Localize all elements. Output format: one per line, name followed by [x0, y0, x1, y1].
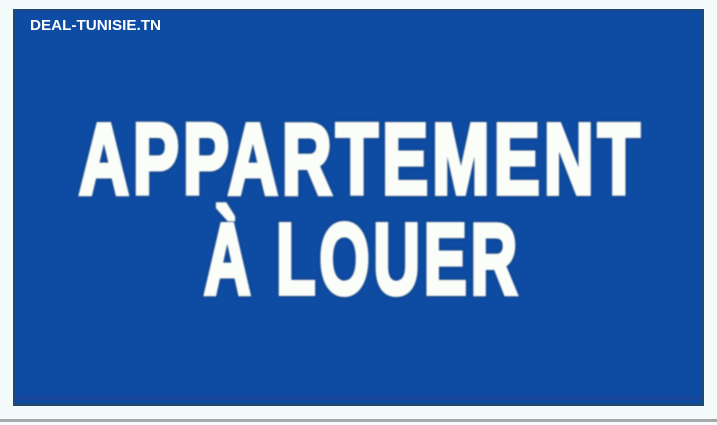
heading: main title [79, 104, 644, 316]
watermark: site name: DEAL-TUNISIE.TN [30, 18, 161, 34]
heading line 2: À LOUER [204, 204, 521, 316]
heading shadow: À LOUER [204, 204, 521, 316]
heading shadow [79, 104, 644, 316]
